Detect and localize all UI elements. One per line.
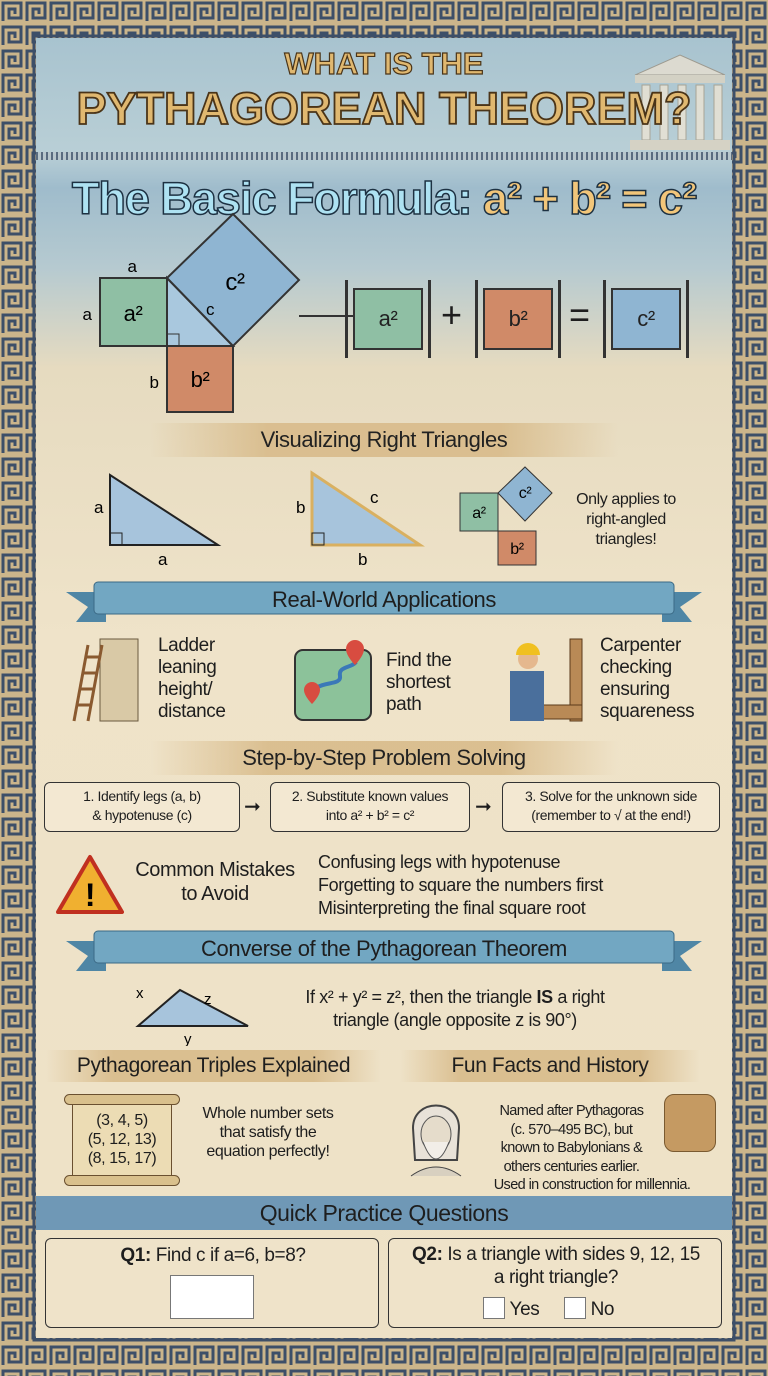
- fun facts text: known to Babylonians &: [501, 1140, 642, 1156]
- title: [76, 46, 692, 134]
- steps: ➞: [475, 796, 491, 818]
- diagram: squares on triangle: a²: [124, 301, 142, 326]
- diagram: squares on triangle: c: [206, 300, 215, 319]
- converse triangle: x: [136, 985, 144, 1002]
- triples text: that satisfy the: [220, 1124, 316, 1141]
- icon: temple: [630, 54, 730, 150]
- application: map: [294, 640, 451, 721]
- scroll: (8, 15, 17): [88, 1150, 156, 1167]
- formula heading: The Basic Formula: a² + b² = c²: [72, 173, 696, 224]
- steps: (remember to √ at the end!): [531, 807, 691, 823]
- mistakes heading: Common Mistakes: [135, 859, 295, 881]
- Q2 panel: Q2: Is a triangle with sides 9, 12, 15: [412, 1244, 700, 1265]
- application: carpenter: squareness: [600, 701, 694, 722]
- fun facts text: [494, 1103, 690, 1193]
- application: ladder: Ladder: [158, 635, 215, 656]
- scroll: (3, 4, 5): [96, 1112, 148, 1129]
- icon: warning: !: [85, 877, 95, 913]
- heading: fun facts: Fun Facts and History: [451, 1054, 648, 1077]
- scroll: [64, 1094, 180, 1186]
- steps: ➞: [244, 796, 260, 818]
- fun facts text: (c. 570–495 BC), but: [511, 1122, 632, 1138]
- heading: fun facts: [400, 1050, 700, 1082]
- steps: 2. Substitute known values: [292, 788, 448, 804]
- application: map: path: [386, 694, 421, 715]
- formula boxes: a²: [379, 306, 397, 331]
- text: Real-World Applications: [272, 587, 496, 612]
- practice header bar: [36, 1196, 732, 1230]
- heading: steps: Step-by-Step Problem Solving: [242, 745, 526, 770]
- icon: tablet: [664, 1094, 716, 1152]
- mistakes list: Forgetting to square the numbers first: [318, 875, 603, 895]
- triangles: b: [296, 498, 305, 517]
- converse text: If x² + y² = z², then the triangle IS a right triangle (angle opposite z is 90°): [305, 987, 605, 1030]
- triangles: a: [94, 498, 104, 517]
- triangles: [94, 466, 553, 569]
- title: PYTHAGOREAN THEOREM?: [76, 83, 692, 134]
- mistakes list: Confusing legs with hypotenuse: [318, 852, 560, 872]
- ribbon: converse: [66, 930, 702, 971]
- mistakes list: Misinterpreting the final square root: [318, 898, 585, 918]
- application: carpenter: checking: [600, 657, 672, 678]
- scroll: (5, 12, 13): [88, 1131, 156, 1148]
- application: carpenter: ensuring: [600, 679, 670, 700]
- triangles: c²: [519, 485, 532, 502]
- steps: & hypotenuse (c): [92, 807, 192, 823]
- ribbon: applications: [66, 582, 702, 622]
- Q2 panel: [388, 1238, 722, 1328]
- formula boxes: [345, 280, 689, 358]
- icon: pythagoras bust: [410, 1104, 462, 1176]
- diagram: squares on triangle: a: [82, 305, 92, 324]
- formula boxes: c²: [637, 306, 655, 331]
- steps: 3. Solve for the unknown side: [525, 788, 697, 804]
- mistakes heading: [135, 859, 295, 905]
- heading: triples: Pythagorean Triples Explained: [77, 1054, 350, 1077]
- application: carpenter: [510, 635, 694, 722]
- text: Converse of the Pythagorean Theorem: [201, 936, 567, 961]
- application: map: Find the: [386, 650, 451, 671]
- Q1 panel: Q1: Find c if a=6, b=8?: [120, 1245, 306, 1266]
- application: ladder: height/: [158, 679, 212, 700]
- heading: steps: [150, 741, 618, 775]
- formula boxes: +: [441, 294, 462, 335]
- converse triangle: z: [204, 991, 211, 1008]
- steps: [44, 782, 720, 832]
- application: ladder: distance: [158, 701, 226, 722]
- icon: warning: [56, 854, 124, 914]
- application: map: shortest: [386, 672, 450, 693]
- heading: triples: [46, 1050, 381, 1082]
- triples text: [202, 1105, 334, 1160]
- diagram: squares on triangle: b²: [191, 367, 209, 392]
- practice header bar: Quick Practice Questions: [260, 1200, 508, 1226]
- application: ladder: leaning: [158, 657, 216, 678]
- title: WHAT IS THE: [284, 46, 484, 81]
- triangles: a: [158, 550, 168, 569]
- triples text: equation perfectly!: [206, 1143, 330, 1160]
- Q2 panel: Yes No: [510, 1299, 614, 1320]
- diagram: squares on triangle: a: [127, 257, 137, 276]
- triangles: b²: [510, 541, 525, 558]
- triangles: a²: [472, 505, 487, 522]
- triangles: c: [370, 488, 379, 507]
- triangles: b: [358, 550, 367, 569]
- fun facts text: Named after Pythagoras: [499, 1103, 643, 1119]
- fun facts text: Used in construction for millennia.: [494, 1177, 690, 1193]
- note: Only applies to right-angled triangles!: [576, 491, 676, 548]
- fun facts text: others centuries earlier.: [504, 1158, 639, 1174]
- Q2 panel: a right triangle?: [494, 1267, 618, 1288]
- converse triangle: [135, 985, 248, 1046]
- heading: visualizing: [150, 423, 618, 457]
- heading: visualizing: Visualizing Right Triangles: [261, 427, 507, 452]
- mistakes heading: to Avoid: [181, 883, 249, 905]
- mistakes list: [318, 852, 604, 918]
- application: carpenter: Carpenter: [600, 635, 681, 656]
- steps: into a² + b² = c²: [326, 807, 414, 823]
- application: ladder: [72, 635, 226, 722]
- diagram: squares on triangle: [82, 212, 353, 413]
- formula boxes: b²: [509, 306, 527, 331]
- diagram: squares on triangle: c²: [225, 269, 245, 296]
- triples text: Whole number sets: [202, 1105, 334, 1122]
- Q1 panel: [45, 1238, 379, 1328]
- diagram: squares on triangle: b: [149, 373, 159, 392]
- formula boxes: =: [569, 294, 590, 335]
- steps: 1. Identify legs (a, b): [83, 788, 201, 804]
